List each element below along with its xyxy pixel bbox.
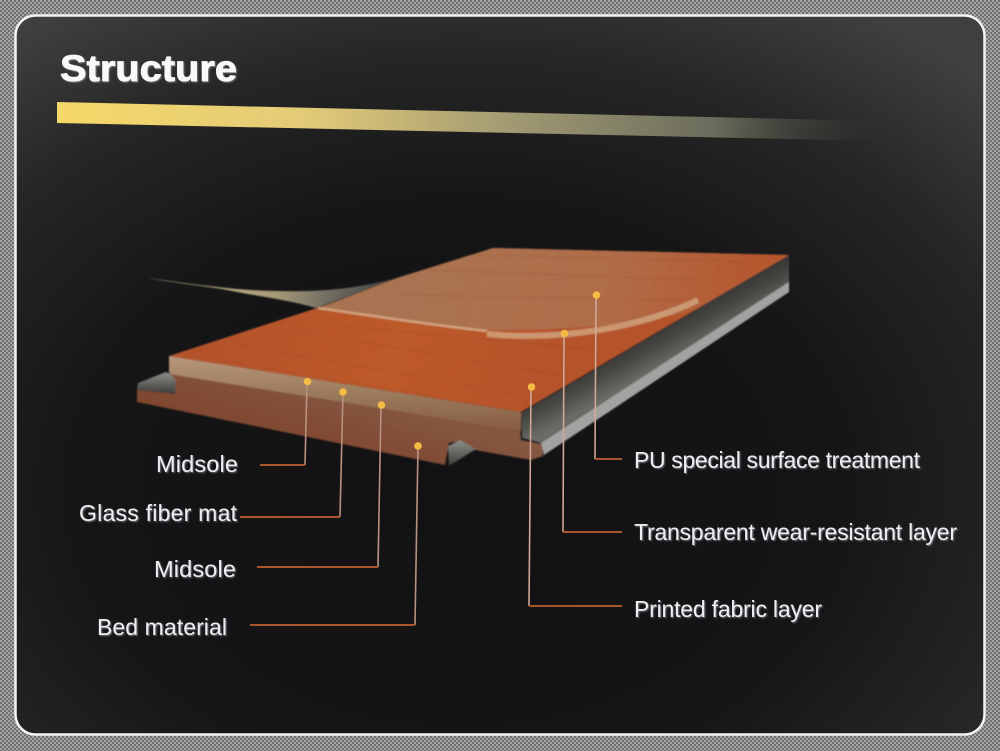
heading gradient bar xyxy=(57,102,880,141)
label: Transparent wear-resistant layer: Transparent wear-resistant layer xyxy=(634,519,957,545)
leader: PU special surface treatment xyxy=(593,291,622,459)
leader: Printed fabric layer xyxy=(528,383,622,606)
printed wood top surface xyxy=(169,248,789,412)
curved film front edge xyxy=(318,308,487,331)
leader: Glass fiber mat xyxy=(240,388,347,517)
board front face xyxy=(137,372,543,465)
left groove xyxy=(137,372,177,394)
right groove xyxy=(448,440,476,466)
light lip on right side xyxy=(541,282,789,455)
leader: Midsole upper xyxy=(260,378,311,465)
label: Printed fabric layer: Printed fabric layer xyxy=(634,596,822,622)
peeled film tip xyxy=(148,277,400,308)
wood grain xyxy=(220,255,760,408)
label: Bed material: Bed material xyxy=(97,614,227,640)
leader: Bed material xyxy=(250,442,422,625)
board right side xyxy=(521,255,789,443)
label: Midsole lower: Midsole xyxy=(154,556,236,582)
title: Structure xyxy=(60,48,237,89)
top veneer edge strip xyxy=(169,356,521,431)
upper film-covered surface xyxy=(318,248,789,330)
label: Midsole upper: Midsole xyxy=(156,451,238,477)
label: Glass fiber mat: Glass fiber mat xyxy=(79,500,238,526)
label: PU special surface treatment: PU special surface treatment xyxy=(634,447,921,473)
leader: Midsole lower xyxy=(257,401,385,567)
leader: Transparent wear-resistant layer xyxy=(561,330,622,532)
floorboard illustration xyxy=(137,248,789,466)
curved film light band xyxy=(487,300,698,336)
